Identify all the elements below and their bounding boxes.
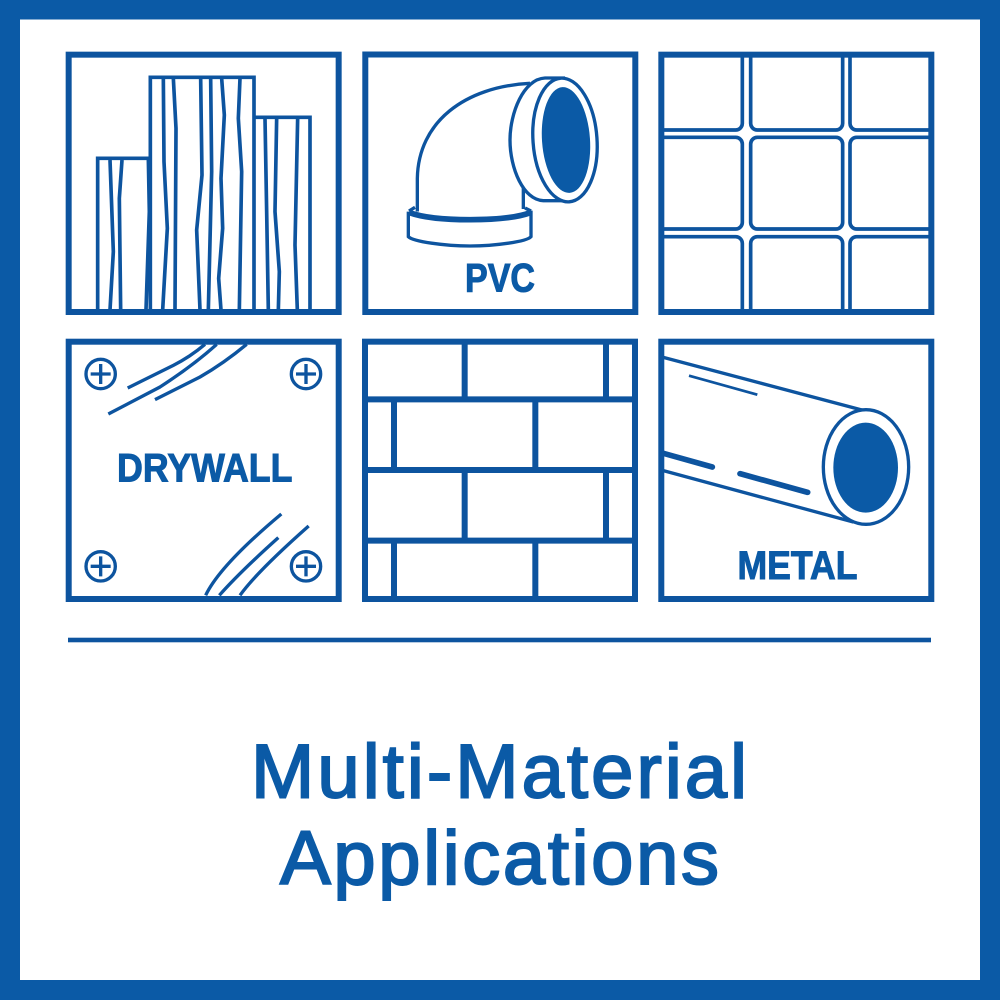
icon: brick wall: [365, 342, 635, 599]
panel: drywall: [69, 342, 339, 599]
icon: PVC elbow pipe: [408, 76, 601, 246]
panel frame: tile: [661, 55, 931, 312]
panel: PVC: [365, 54, 635, 312]
panel frame: brick: [365, 342, 635, 599]
panel frame: metal: [661, 342, 931, 599]
icon: metal pipe: [663, 357, 909, 524]
icon: wood planks: [98, 77, 310, 310]
panel frame: drywall: [69, 342, 339, 599]
label: DRYWALL: DRYWALL: [117, 446, 292, 490]
icon: drywall cracks and screws: [86, 344, 321, 595]
panel frame: PVC: [365, 54, 635, 312]
title: [251, 730, 747, 901]
panel frame: wood: [69, 55, 339, 312]
panel: tile: [658, 52, 934, 315]
panel: wood: [69, 55, 339, 312]
panel: brick: [365, 342, 635, 599]
icon: tile grid: [664, 58, 928, 309]
label: METAL: METAL: [738, 544, 858, 588]
panel: metal: [661, 342, 931, 599]
title line 1: Multi-Material: [251, 730, 747, 814]
label: PVC: PVC: [465, 256, 535, 300]
title line 2: Applications: [280, 816, 719, 901]
divider: [68, 638, 931, 642]
